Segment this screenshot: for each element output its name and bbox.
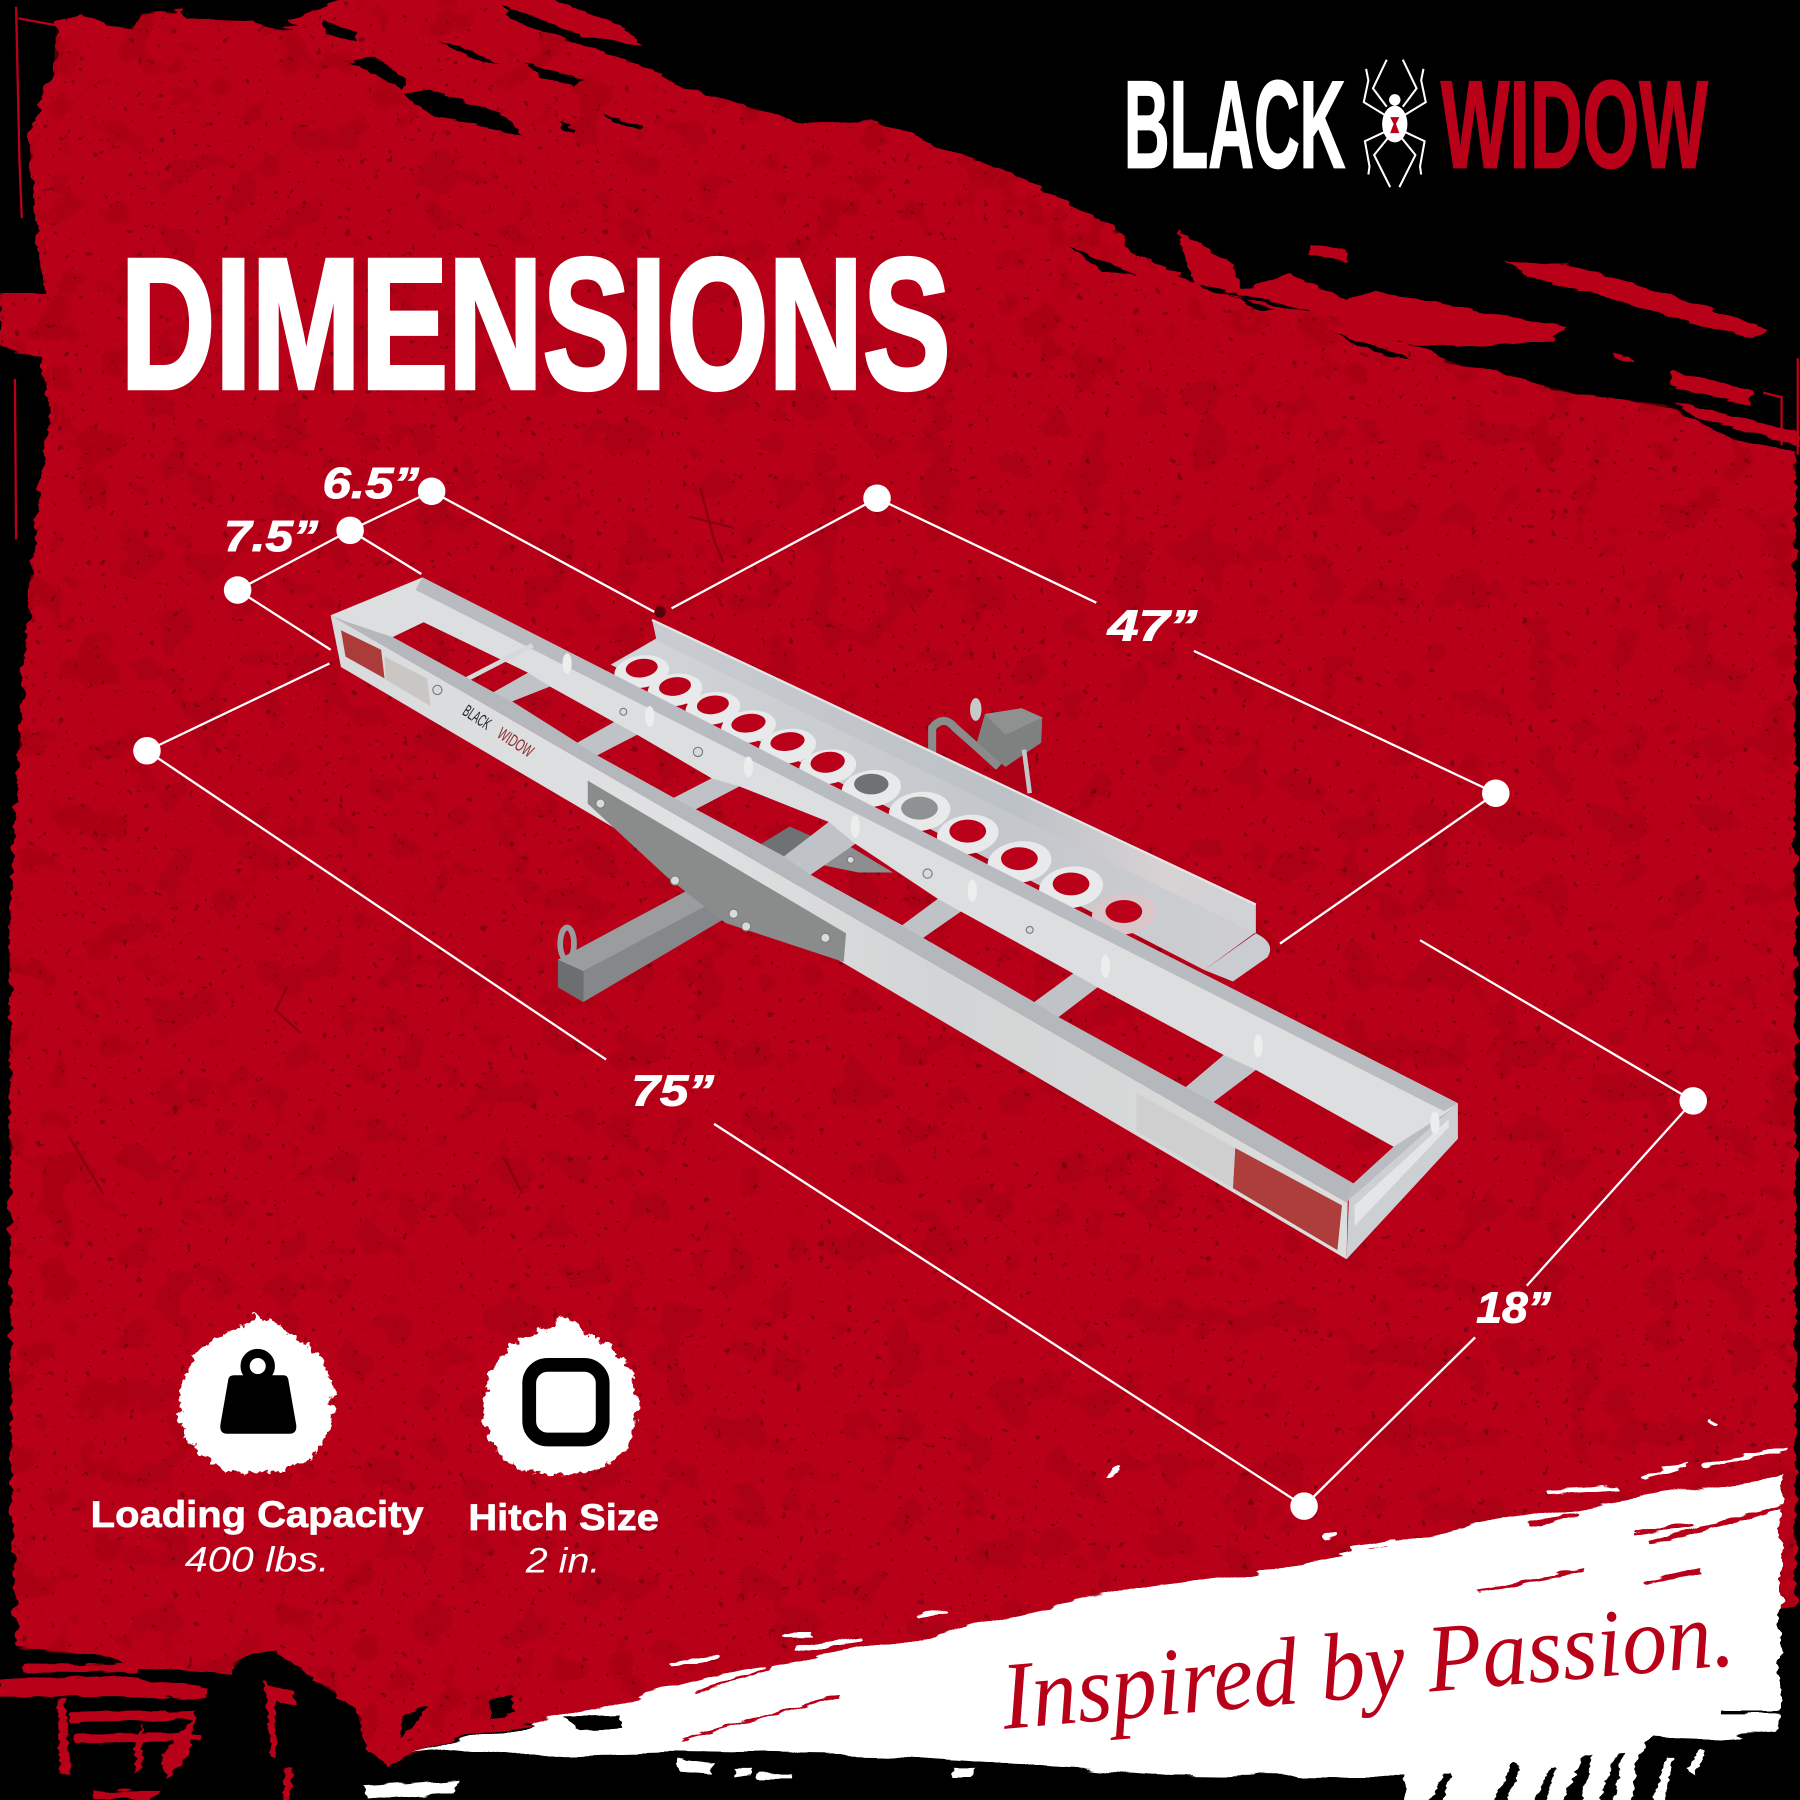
hitch plate <box>588 781 846 962</box>
icon: spider <box>1364 60 1426 187</box>
rack logo: BLACK <box>459 701 495 734</box>
side wall <box>331 615 1348 1259</box>
white flecks on black <box>363 1747 1706 1800</box>
label 75: 75” <box>631 1067 714 1115</box>
text: hitch size: Hitch Size <box>468 1497 659 1538</box>
label 18: 18” <box>1476 1284 1551 1332</box>
dark scratches on red <box>69 488 735 1194</box>
text: hitch size: 2 in. <box>525 1541 600 1581</box>
dimension dots <box>133 478 1707 1520</box>
label 6.5: 6.5” <box>323 460 419 508</box>
welds <box>562 653 1440 1134</box>
ramp holes <box>612 652 1159 939</box>
hold-down rod <box>466 645 533 680</box>
frame top face with openings <box>331 577 1458 1200</box>
rack logo: WIDOW <box>494 723 538 761</box>
near rail <box>331 615 1353 1203</box>
red streaks on black, bottom-left <box>0 1663 296 1800</box>
reflectors and stickers <box>341 630 385 678</box>
red islands on black, top-right <box>473 0 1800 447</box>
white flecks on red <box>672 1419 1784 1665</box>
panel: white torn strip <box>363 1419 1784 1800</box>
logo: Black Widow <box>1124 57 1708 195</box>
text: loading capacity: 400 lbs. <box>185 1540 329 1580</box>
scratch lines left and right <box>15 7 1798 540</box>
logo word: BLACK: BLACK <box>1124 57 1345 195</box>
text: hitch size <box>468 1497 659 1581</box>
gray beam under the frame <box>761 827 829 863</box>
text: loading capacity: Loading Capacity <box>91 1494 424 1535</box>
cross bars <box>494 673 1256 1102</box>
hitch tube <box>558 880 723 1002</box>
wheel ramp with holes <box>611 620 1270 982</box>
text: loading capacity <box>91 1494 424 1580</box>
bracket under the frame <box>824 845 893 872</box>
far hitch receiver <box>932 698 1042 793</box>
icon: loading capacity <box>179 1314 334 1473</box>
far rail <box>416 577 1458 1111</box>
end rail <box>1349 1103 1458 1200</box>
label 7.5: 7.5” <box>224 513 318 561</box>
dimension lines <box>147 491 1693 1506</box>
title: DIMENSIONS <box>121 221 951 428</box>
black slashes in red, top-left <box>138 0 1412 358</box>
black drips at strip bottom <box>565 1710 1780 1800</box>
product: motorcycle carrier rack <box>331 577 1458 1259</box>
end face <box>1347 1103 1458 1259</box>
dimension labels <box>224 460 1551 1332</box>
bolts <box>433 685 1033 942</box>
icon: hitch size <box>483 1317 638 1475</box>
red streaks on white <box>683 1506 1784 1739</box>
label 47: 47” <box>1107 603 1198 651</box>
rack logo <box>459 701 538 761</box>
dark spot on red <box>654 606 666 618</box>
black notches at the red bottom <box>399 1694 514 1738</box>
tagline: Inspired by Passion. <box>996 1579 1738 1750</box>
